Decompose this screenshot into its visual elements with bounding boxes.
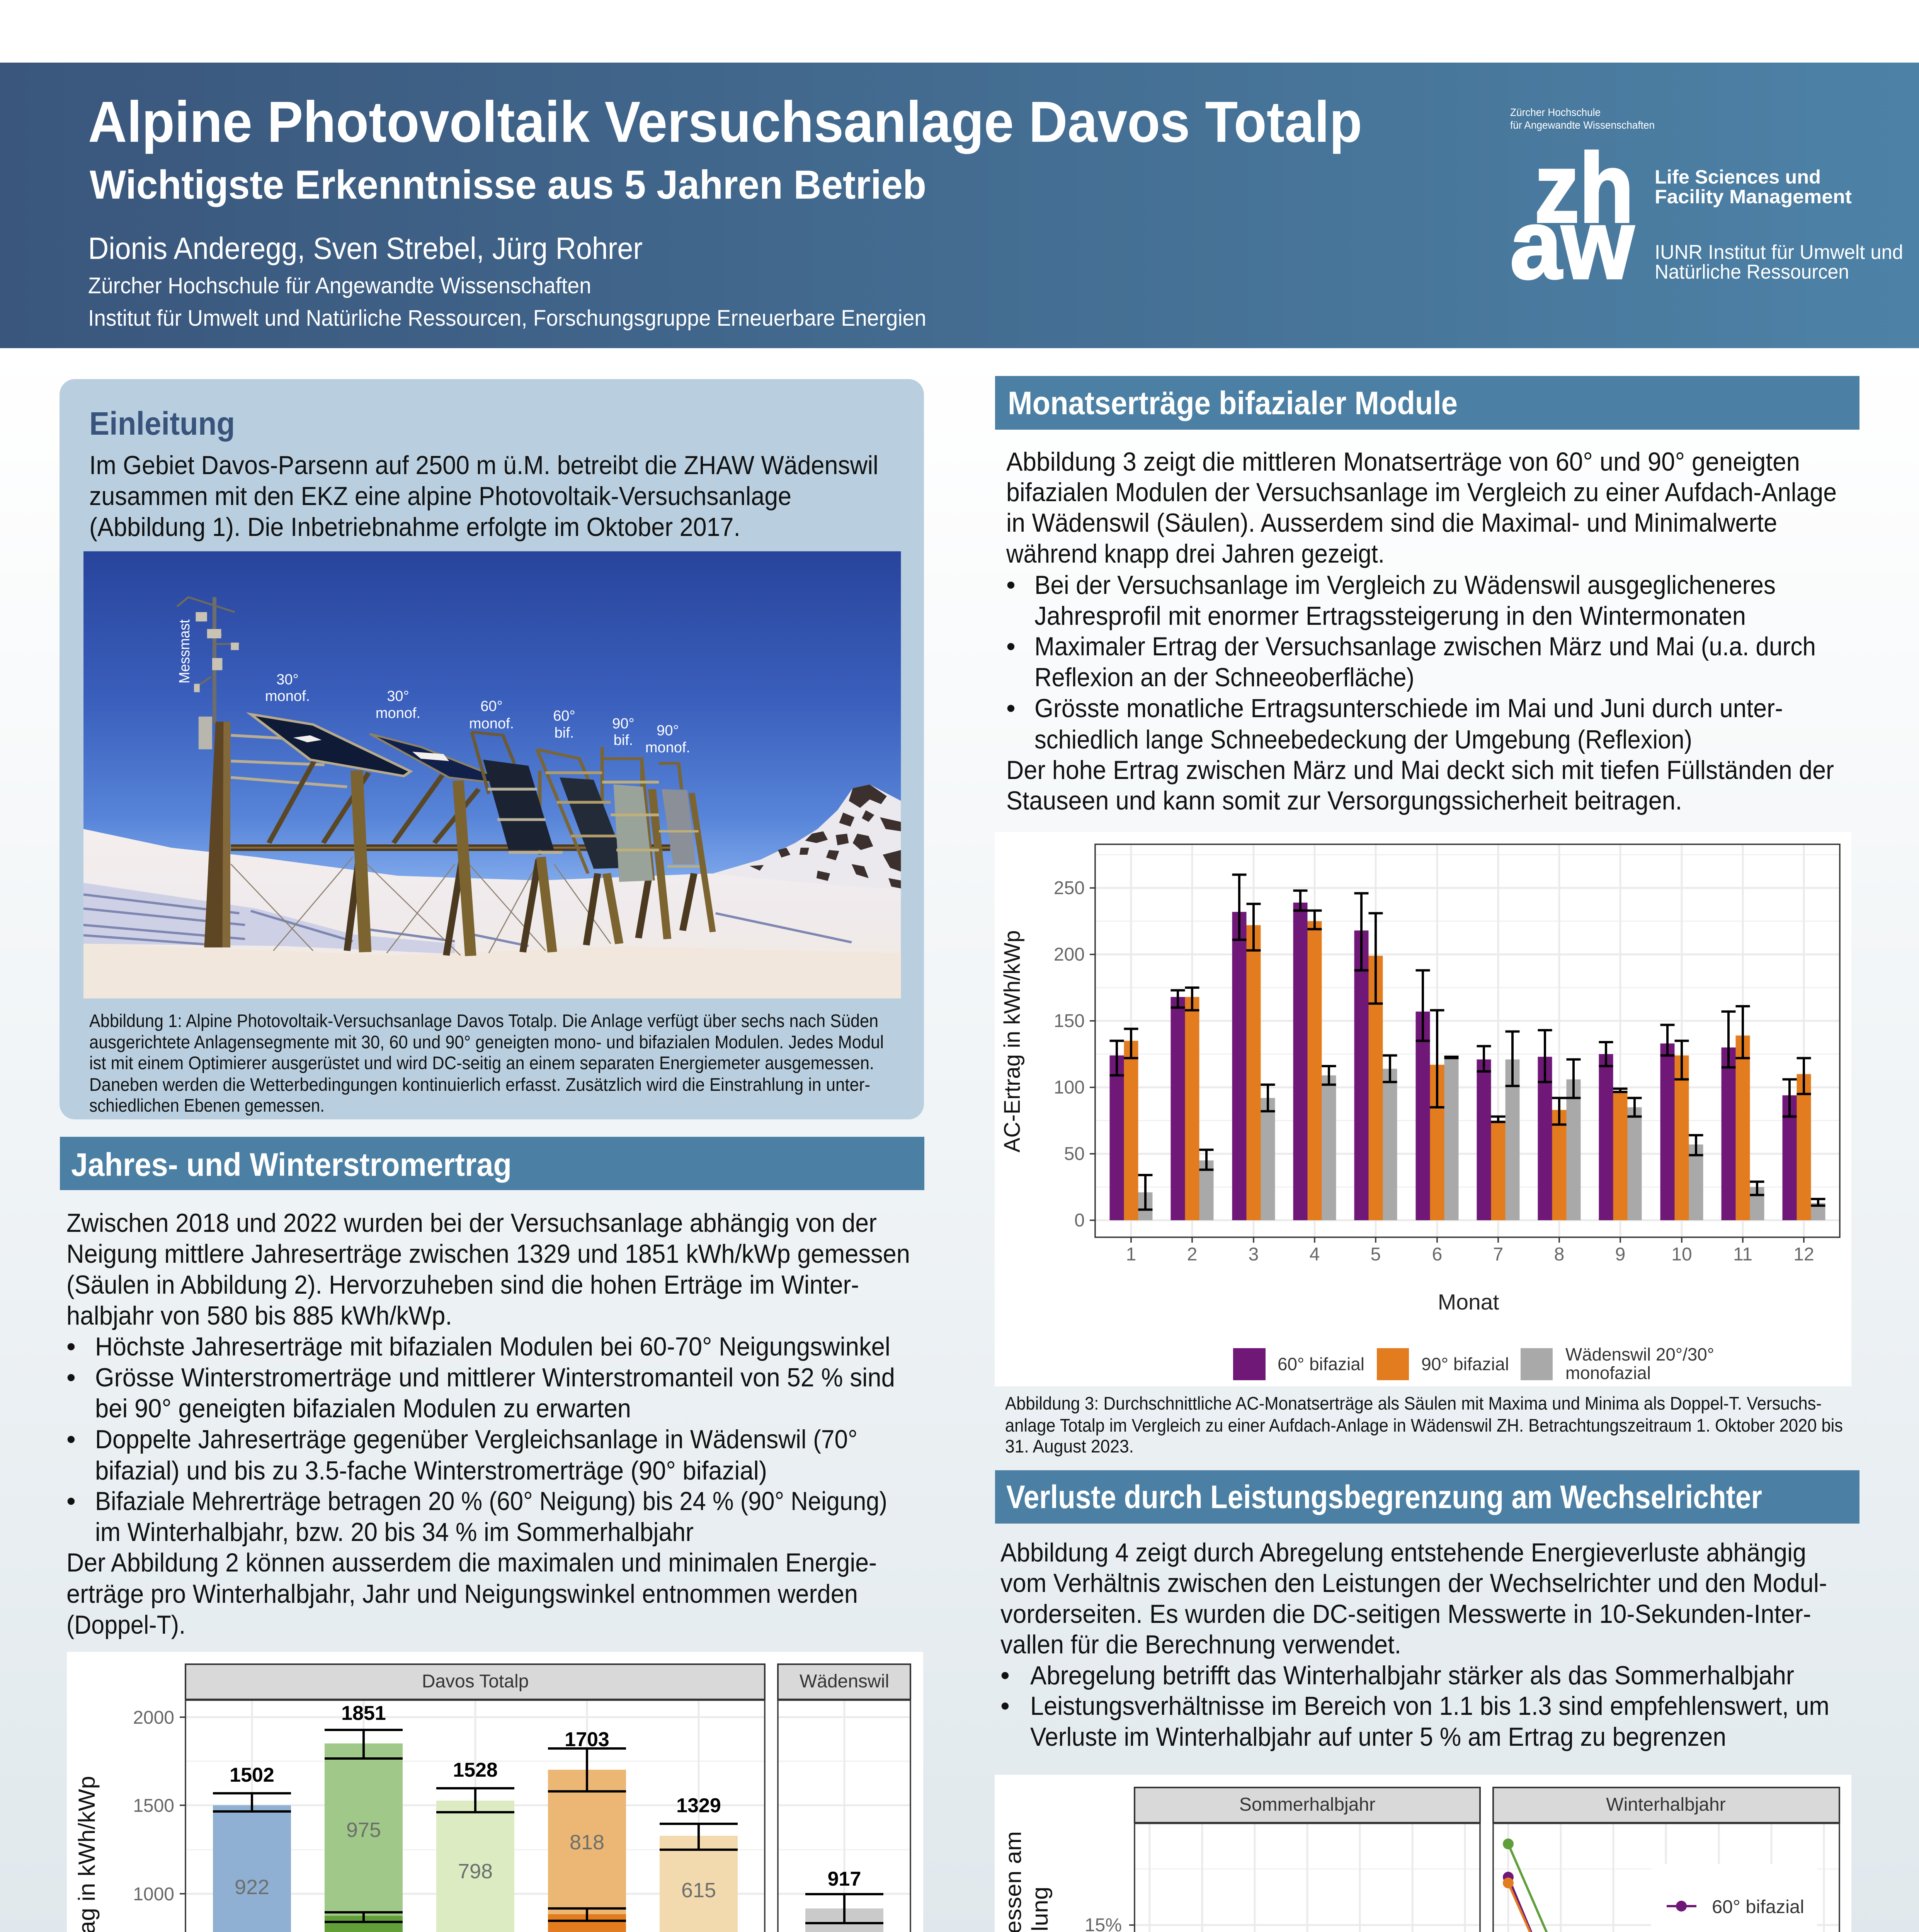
x axis labels: 10	[1671, 1244, 1692, 1265]
bars and error bars by month	[1110, 875, 1825, 1220]
y axis labels: 1500	[133, 1796, 174, 1816]
logo: ZHAW: Zürcher Hochschule	[1510, 106, 1601, 118]
x axis labels: 11	[1733, 1244, 1752, 1265]
text block: Monatserträge: •	[1006, 570, 1016, 600]
y axis labels: 150	[1054, 1011, 1085, 1031]
affiliation: Institut für Umwelt und Natürliche Ressourcen, Forschungsgruppe Erneuerbare Energien	[88, 306, 926, 331]
section heading: Monatserträge bifazialer Module: Monatserträge bifazialer Module	[1008, 385, 1458, 421]
text block: Jahres- und Winterstromertrag: Der Abbildung 2 können ausserdem die maximalen und minimalen Energie-	[66, 1548, 877, 1577]
text block: Monatserträge: Der hohe Ertrag zwischen März und Mai deckt sich mit tiefen Füllständen der	[1006, 755, 1834, 785]
legend	[1667, 1897, 1804, 1932]
summer value labels: 615	[681, 1879, 716, 1902]
photo labels: bif.	[614, 732, 633, 748]
text block: Monatserträge: schiedlich lange Schneebedeckung der Umgebung (Reflexion)	[1034, 725, 1692, 754]
text block: Monatserträge: •	[1006, 694, 1016, 723]
caption: figure 3	[995, 1391, 1884, 1461]
logo: ZHAW: Natürliche Ressourcen	[1655, 261, 1849, 283]
text: introduction: zusammen mit den EKZ eine alpine Photovoltaik-Versuchsanlage	[89, 481, 791, 511]
logo: ZHAW: Facility Management	[1655, 186, 1852, 207]
panel: Einleitung	[60, 379, 924, 1119]
y axis title: AC-Ertrag in kWh/kWp	[1000, 930, 1025, 1152]
series: 60° bifazial	[1144, 1872, 1829, 1932]
photo labels: 90°	[657, 723, 679, 739]
title: Alpine Photovoltaik Versuchsanlage Davos Totalp	[88, 89, 1362, 154]
total labels: 1502	[230, 1764, 274, 1786]
authors: Dionis Anderegg, Sven Strebel, Jürg Rohrer	[88, 231, 643, 265]
section heading: Jahres- und Winterstromertrag	[60, 1137, 924, 1190]
text block: Jahres- und Winterstromertrag: bei 90° geneigten bifazialen Modulen zu erwarten	[95, 1394, 631, 1423]
text block: Verluste: Abregelung betrifft das Winterhalbjahr stärker als das Sommerhalbjahr	[1030, 1661, 1794, 1690]
total labels: 1329	[676, 1794, 721, 1817]
text block: Jahres- und Winterstromertrag: bifazial) und bis zu 3.5-fache Winterstromerträge (90° bifazial)	[95, 1456, 767, 1485]
chart: figure 3 monthly bars	[995, 832, 1851, 1386]
subtitle: Wichtigste Erkenntnisse aus 5 Jahren Betrieb	[90, 162, 926, 207]
text block: Verluste: vorderseiten. Es wurden die DC-seitigen Messwerte in 10-Sekunden-Inter-	[1000, 1599, 1811, 1629]
text block: Verluste: •	[1000, 1691, 1010, 1721]
summer value labels	[235, 1818, 862, 1932]
x axis title: Monat	[1438, 1290, 1499, 1315]
text block: Jahres- und Winterstromertrag: Grösse Winterstromerträge und mittlerer Winterstromanteil von 52 % sind	[95, 1363, 895, 1392]
affiliation: Zürcher Hochschule für Angewandte Wissenschaften	[88, 273, 591, 298]
strips: Davos Totalp	[422, 1671, 529, 1692]
text block: Monatserträge: Maximaler Ertrag der Versuchsanlage zwischen März und Mai (u.a. durch	[1034, 632, 1816, 661]
logo: ZHAW: Life Sciences und	[1655, 166, 1821, 188]
series: 90° bifazial	[1144, 1878, 1829, 1932]
text block: Monatserträge: Jahresprofil mit enormer Ertragssteigerung in den Wintermonaten	[1034, 601, 1746, 631]
photo labels	[177, 619, 690, 756]
text block: Monatserträge: in Wädenswil (Säulen). Ausserdem sind die Maximal- und Minimalwerte	[1006, 508, 1777, 537]
text block: Jahres- und Winterstromertrag: (Doppel-T).	[66, 1610, 185, 1639]
x axis labels: 5	[1371, 1244, 1381, 1265]
caption: figure 3: Abbildung 3: Durchschnittliche AC-Monatserträge als Säulen mit Maxima und Minima als Doppel-T. Versuchs-	[1005, 1393, 1822, 1413]
header band	[0, 63, 1919, 348]
section heading: Monatserträge bifazialer Module	[995, 376, 1859, 430]
y axis labels: 250	[1054, 878, 1085, 898]
text block: Monatserträge	[995, 440, 1884, 823]
strips: Sommerhalbjahr	[1239, 1794, 1375, 1815]
text: introduction: (Abbildung 1). Die Inbetriebnahme erfolgte im Oktober 2017.	[89, 512, 740, 542]
photo labels: monof.	[469, 716, 514, 732]
bars	[213, 1743, 883, 1932]
text block: Jahres- und Winterstromertrag: •	[66, 1425, 76, 1454]
text block: Jahres- und Winterstromertrag: •	[66, 1332, 76, 1361]
grid	[1135, 1823, 1839, 1932]
error bars	[213, 1730, 883, 1932]
y axis labels: 1000	[133, 1884, 174, 1905]
y axis labels	[1054, 878, 1085, 1231]
text block: Jahres- und Winterstromertrag: Doppelte Jahreserträge gegenüber Vergleichsanlage in Wädenswil (70°	[95, 1425, 857, 1454]
photo labels: 90°	[612, 716, 635, 732]
text block: Jahres- und Winterstromertrag: Höchste Jahreserträge mit bifazialen Modulen bei 60-70° Neigungswinkel	[95, 1332, 890, 1361]
x axis labels: 7	[1493, 1244, 1503, 1265]
legend background	[1651, 1864, 1817, 1932]
caption: figure 1: ausgerichtete Anlagensegmente mit 30, 60 und 90° geneigten mono- und bifazialen Modulen. Jedes Modul	[89, 1032, 884, 1052]
logo: ZHAW: für Angewandte Wissenschaften	[1510, 119, 1655, 131]
text block: Jahres- und Winterstromertrag: im Winterhalbjahr, bzw. 20 bis 34 % im Sommerhalbjahr	[95, 1517, 694, 1547]
text block: Monatserträge: bifazialen Modulen der Versuchsanlage im Vergleich zu einer Aufdach-Anlage	[1006, 478, 1837, 507]
x axis labels: 6	[1432, 1244, 1442, 1265]
logo: ZHAW: aw	[1510, 189, 1634, 299]
strips: Wädenswil	[800, 1671, 889, 1692]
panel borders and ticks	[180, 1700, 910, 1932]
text block: Jahres- und Winterstromertrag	[58, 1206, 931, 1642]
caption: figure 1: Daneben werden die Wetterbedingungen kontinuierlich erfasst. Zusätzlich wird die Einstrahlung in unter-	[89, 1074, 870, 1095]
total labels: 1528	[453, 1759, 498, 1781]
logo: ZHAW: zh	[1535, 133, 1634, 243]
y axis labels: 0	[1074, 1210, 1085, 1231]
total labels: 917	[828, 1868, 861, 1890]
text block: Jahres- und Winterstromertrag: Zwischen 2018 und 2022 wurden bei der Versuchsanlage abhängig von der	[66, 1208, 877, 1238]
caption: figure 1	[89, 1010, 884, 1116]
legend: monofazial	[1565, 1363, 1651, 1383]
x axis labels: 2	[1187, 1244, 1197, 1265]
y axis labels	[133, 1708, 174, 1932]
section heading: Verluste: Verluste durch Leistungsbegrenzung am Wechselrichter	[1006, 1479, 1762, 1515]
text block: Verluste: •	[1000, 1661, 1010, 1690]
summer value labels: 818	[570, 1831, 604, 1854]
plot border and ticks	[1090, 844, 1840, 1243]
x axis labels: 4	[1310, 1244, 1320, 1265]
total labels: 1703	[565, 1728, 609, 1751]
legend: 60° bifazial	[1712, 1897, 1804, 1917]
text block: Monatserträge: Grösste monatliche Ertragsunterschiede im Mai und Juni durch unter-	[1034, 694, 1783, 723]
x axis labels: 3	[1249, 1244, 1259, 1265]
x axis labels: 1	[1126, 1244, 1136, 1265]
text block: Monatserträge: Abbildung 3 zeigt die mittleren Monatserträge von 60° und 90° geneigten	[1006, 447, 1800, 476]
y axis labels: 2000	[133, 1708, 174, 1728]
chart: figure 2 stacked bars	[67, 1652, 923, 1932]
y axis labels: 200	[1054, 944, 1085, 965]
affiliation	[88, 273, 926, 331]
text block: Verluste	[995, 1538, 1884, 1758]
caption: figure 1: schiedlichen Ebenen gemessen.	[89, 1095, 325, 1116]
text block: Verluste: vallen für die Berechnung verwendet.	[1000, 1630, 1401, 1659]
photo labels: 30°	[387, 688, 409, 704]
text block: Jahres- und Winterstromertrag: erträge pro Winterhalbjahr, Jahr und Neigungswinkel entnommen werden	[66, 1579, 858, 1609]
logo: ZHAW	[1510, 106, 1903, 299]
text block: Monatserträge: •	[1006, 632, 1016, 661]
photo labels: 60°	[480, 698, 503, 714]
heading: Einleitung: Einleitung	[89, 405, 235, 442]
text block: Monatserträge: Bei der Versuchsanlage im Vergleich zu Wädenswil ausgeglicheneres	[1034, 570, 1776, 600]
x axis labels: 8	[1554, 1244, 1564, 1265]
photo labels: monof.	[265, 688, 310, 704]
x axis labels: 12	[1793, 1244, 1814, 1265]
text block: Verluste: Leistungsverhältnisse im Bereich von 1.1 bis 1.3 sind empfehlenswert, um	[1030, 1691, 1829, 1721]
legend: 60° bifazial	[1278, 1354, 1364, 1374]
photo labels: 60°	[553, 708, 575, 724]
strips	[1135, 1787, 1839, 1823]
strips	[185, 1664, 910, 1699]
text block: Monatserträge: während knapp drei Jahren gezeigt.	[1006, 539, 1385, 568]
caption: figure 1: ist mit einem Optimierer ausgerüstet und wird DC-seitig an einem separaten Energiemeter ausgemessen.	[89, 1053, 874, 1073]
legend: 90° bifazial	[1421, 1354, 1509, 1374]
y axis title	[1001, 1831, 1053, 1932]
summer value labels: 798	[458, 1860, 493, 1883]
caption: figure 1: Abbildung 1: Alpine Photovoltaik-Versuchsanlage Davos Totalp. Die Anlage verfügt über sechs nach Süden	[89, 1010, 878, 1031]
text block: Verluste: Abbildung 4 zeigt durch Abregelung entstehende Energieverluste abhängig	[1000, 1538, 1806, 1567]
text block: Jahres- und Winterstromertrag: halbjahr von 580 bis 885 kWh/kWp.	[66, 1301, 452, 1330]
caption: figure 3: 31. August 2023.	[1005, 1436, 1134, 1456]
photo labels: monof.	[645, 740, 690, 756]
section heading: Verluste	[995, 1470, 1859, 1524]
photo labels: Messmast	[177, 619, 193, 684]
section heading: Jahres- und Winterstromertrag: Jahres- und Winterstromertrag	[71, 1146, 512, 1183]
text: introduction: Im Gebiet Davos-Parsenn auf 2500 m ü.M. betreibt die ZHAW Wädenswil	[89, 451, 878, 480]
text block: Jahres- und Winterstromertrag: (Säulen in Abbildung 2). Hervorzuheben sind die hohen Erträge im Winter-	[66, 1270, 859, 1299]
photo labels: 30°	[276, 672, 299, 688]
summer value labels: 922	[235, 1876, 269, 1899]
text block: Verluste: vom Verhältnis zwischen den Leistungen der Wechselrichter und den Modul-	[1000, 1568, 1827, 1598]
chart: figure 4 line charts	[995, 1775, 1851, 1932]
strips: Winterhalbjahr	[1606, 1794, 1726, 1815]
logo: ZHAW: IUNR Institut für Umwelt und	[1655, 241, 1903, 264]
x axis labels	[1126, 1244, 1814, 1265]
legend: Wädenswil 20°/30°	[1565, 1344, 1714, 1364]
panel backgrounds and grid	[185, 1700, 910, 1932]
figure 1: photo of the test site	[83, 551, 901, 998]
y axis labels: 50	[1064, 1144, 1085, 1164]
total labels	[230, 1702, 861, 1890]
y axis labels: 100	[1054, 1077, 1085, 1098]
text: introduction	[89, 451, 878, 542]
grid	[1095, 844, 1840, 1237]
text block: Monatserträge: Reflexion an der Schneeoberfläche)	[1034, 663, 1414, 692]
x axis labels: 9	[1615, 1244, 1625, 1265]
photo labels: monof.	[376, 705, 420, 721]
text block: Verluste: Verluste im Winterhalbjahr auf unter 5 % am Ertrag zu begrenzen	[1030, 1722, 1726, 1752]
legend	[1233, 1344, 1714, 1383]
total labels: 1851	[341, 1702, 386, 1725]
summer value labels: 975	[346, 1818, 381, 1842]
text block: Jahres- und Winterstromertrag: •	[66, 1486, 76, 1516]
text block: Monatserträge: Stauseen und kann somit zur Versorgungssicherheit beitragen.	[1006, 786, 1682, 815]
photo labels: bif.	[555, 725, 574, 741]
text block: Jahres- und Winterstromertrag: •	[66, 1363, 76, 1392]
series: 70° bifazial	[1144, 1838, 1829, 1932]
panel borders and ticks	[1129, 1823, 1839, 1932]
